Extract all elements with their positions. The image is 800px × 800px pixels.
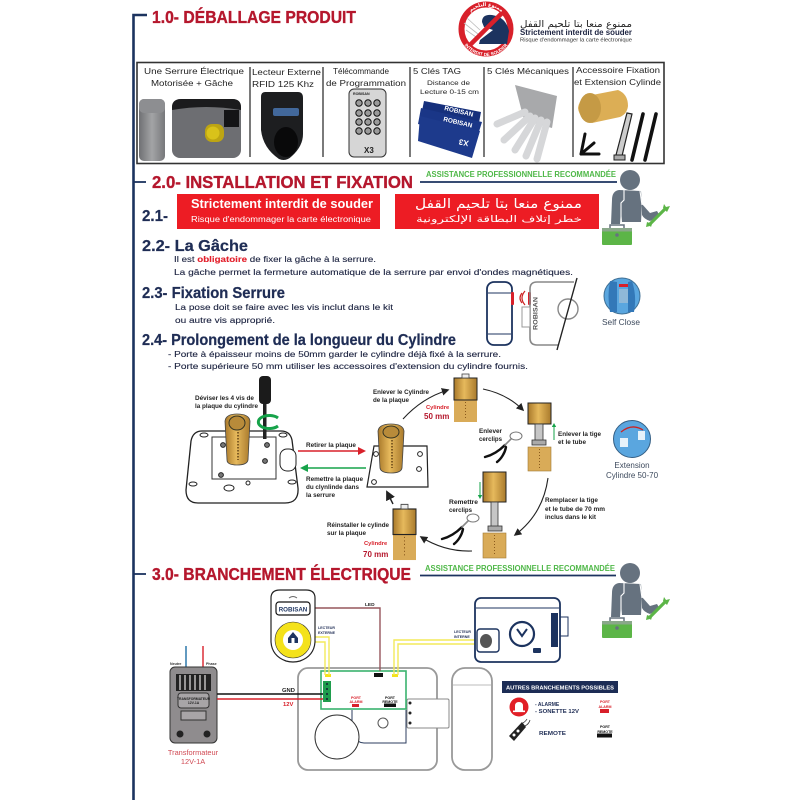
item: programming remote: ROBISAN bbox=[353, 92, 370, 96]
label: remove rod: Enlever la tige bbox=[558, 431, 602, 438]
item: TAG keys: Lecture 0-15 cm bbox=[420, 89, 479, 96]
arrow: replace rod: et le tube de 70 mm bbox=[545, 506, 606, 513]
callout: French warning bbox=[177, 194, 380, 229]
item: TAG keys: 5 Clés TAG bbox=[413, 67, 461, 76]
step 2.4: cylinder extension: - Porte à épaisseur moins de 50mm garder le cylindre déjà fixé à la serrure. bbox=[168, 349, 501, 359]
item: TAG keys: ROBISAN bbox=[443, 116, 473, 130]
arrow: refit plate bbox=[300, 464, 366, 499]
device: transformer: 12V-1A bbox=[188, 701, 200, 705]
panel: PCB: PORT bbox=[351, 696, 362, 700]
icon: technician bbox=[602, 563, 670, 638]
wire: LED bbox=[315, 602, 380, 671]
device: transformer: TRANSFORMATEUR bbox=[177, 697, 211, 701]
device: transformer bbox=[170, 646, 217, 743]
diagram: strike and lock magnetic link bbox=[487, 278, 578, 350]
item: programming remote: de Programmation bbox=[326, 79, 407, 88]
arrow bbox=[421, 537, 472, 551]
label: unscrew: Déviser les 4 vis de bbox=[195, 395, 255, 402]
step: remove cylinder bbox=[373, 389, 448, 419]
icon: no welding badge bbox=[458, 2, 514, 56]
cylinder 70 mm: Cylindre bbox=[364, 541, 388, 547]
device: external reader: EXTERNE bbox=[318, 631, 336, 635]
diagram: strike outline bbox=[452, 668, 492, 770]
panel: PCB: PORT bbox=[385, 696, 396, 700]
wire: LED: LED bbox=[365, 602, 375, 608]
device: internal lock reader bbox=[454, 598, 568, 662]
label: remote: REMOTE bbox=[539, 731, 566, 737]
arrow: remove plate bbox=[298, 442, 366, 455]
step: remove cylinder: de la plaque bbox=[373, 397, 410, 404]
title: 1.0 unpacking: 1.0- DÉBALLAGE PRODUIT bbox=[152, 6, 356, 27]
step 2.3: lock fixing: 2.3- Fixation Serrure bbox=[142, 285, 285, 302]
text block: welding warning header bbox=[520, 19, 632, 44]
text block: welding warning header: Strictement interdit de souder bbox=[520, 28, 632, 37]
item: fixing accessories: Accessoire Fixation bbox=[576, 66, 661, 75]
label: transformer bbox=[168, 748, 219, 766]
label: remove rod: et le tube bbox=[558, 439, 587, 446]
banner: professional assistance: ASSISTANCE PROFESSIONNELLE RECOMMANDÉE bbox=[426, 170, 617, 179]
label: unscrew: la plaque du cylindre bbox=[195, 403, 259, 410]
label: extension: Extension bbox=[614, 461, 650, 470]
icon: circlip pliers: cerclips bbox=[479, 436, 503, 443]
step 2.3: lock fixing: La pose doit se faire avec les vis inclut dans le kit bbox=[175, 302, 394, 312]
heading: 3.0 wiring: 3.0- BRANCHEMENT ÉLECTRIQUE bbox=[152, 563, 411, 584]
item: programming remote bbox=[326, 67, 407, 157]
item: fixing accessories: et Extension Cylinde bbox=[574, 78, 662, 87]
device: internal lock reader: LECTEUR bbox=[454, 630, 471, 634]
device: external reader: LECTEUR bbox=[318, 626, 335, 630]
item: programming remote: X3 bbox=[364, 146, 374, 155]
icon: circlip pliers bbox=[479, 428, 522, 462]
port: remote bbox=[597, 725, 613, 738]
step 2.3: lock fixing bbox=[142, 285, 394, 325]
panel: PCB: ALARM bbox=[350, 700, 362, 704]
diagram: small plate with cylinder bbox=[367, 424, 428, 487]
text block: welding warning header: ممنوع منعا بتا تلحيم القفل bbox=[520, 19, 632, 30]
label: alarm: - ALARME bbox=[535, 702, 560, 708]
item: TAG keys: ROBISAN bbox=[444, 105, 474, 119]
icon: extension cylinder bbox=[614, 420, 650, 458]
icon: technician bbox=[602, 170, 670, 245]
header bar: AUTRES BRANCHEMENTS POSSIBLES bbox=[506, 686, 615, 692]
step 2.2: strike: 2.2- La Gâche bbox=[142, 238, 248, 255]
exploded cylinder: refit rod bbox=[478, 472, 506, 558]
step: remove cylinder: Enlever le Cylindre bbox=[373, 389, 430, 396]
label: transformer: Transformateur bbox=[168, 748, 219, 757]
arrow: replace rod bbox=[515, 478, 606, 535]
step 2.4: cylinder extension: 2.4- Prolongement de la longueur du Cylindre bbox=[142, 332, 456, 349]
item: mechanical keys bbox=[487, 67, 569, 159]
step 2.4: cylinder extension: - Porte supérieure 50 mm utiliser les accessoires d'extension du cylindre fournis. bbox=[168, 361, 528, 371]
label: extension: Cylindre 50-70 bbox=[606, 471, 659, 480]
label: remove rod bbox=[552, 423, 602, 446]
port: alarm: ALARM bbox=[599, 705, 611, 709]
wires: power: 12V bbox=[283, 702, 293, 708]
step 2.4: cylinder extension bbox=[142, 332, 528, 371]
wires: power bbox=[217, 688, 323, 708]
item: RFID reader: Lecteur Externe bbox=[252, 68, 322, 77]
label: alarm bbox=[535, 702, 580, 715]
panel: other connections bbox=[502, 681, 618, 741]
arrow: refit plate: du clynlinde dans bbox=[306, 484, 360, 491]
icon: screwdriver bbox=[258, 376, 278, 439]
banner: professional assistance: ASSISTANCE PROFESSIONNELLE RECOMMANDÉE bbox=[425, 564, 616, 573]
item: lock and strike: Une Serrure Électrique bbox=[144, 66, 245, 76]
label: unscrew bbox=[195, 395, 259, 410]
arrow: refit plate: Remettre la plaque bbox=[306, 476, 364, 483]
icon: circlip pliers: Enlever bbox=[479, 428, 503, 435]
item: lock and strike bbox=[139, 66, 245, 161]
item: TAG keys: Distance de bbox=[427, 80, 471, 87]
wires: internal reader bbox=[394, 640, 476, 675]
item: programming remote: Télécommande bbox=[333, 67, 389, 76]
step 2.1 number: 2.1- bbox=[142, 208, 168, 225]
section rule: left navy spine bbox=[134, 15, 147, 800]
icon: no welding badge: ممنوع التلحيم bbox=[470, 2, 502, 13]
icon: refit circlips bbox=[442, 499, 479, 544]
icon: refit circlips: cerclips bbox=[449, 507, 473, 514]
label: self close: Self Close bbox=[602, 318, 641, 327]
item: fixing accessories bbox=[574, 66, 662, 160]
wires: power: GND bbox=[282, 688, 295, 694]
callout: French warning: Risque d'endommager la carte électronique bbox=[191, 215, 372, 224]
arrow: replace rod: inclus dans le kit bbox=[545, 514, 596, 521]
icon: self close bbox=[604, 278, 640, 314]
port: remote: PORT bbox=[600, 725, 611, 729]
icon: refit circlips: Remettre bbox=[449, 499, 479, 506]
item: TAG keys bbox=[413, 67, 482, 158]
cylinder 50 mm: 50 mm bbox=[424, 412, 449, 421]
item: lock and strike: Motorisée + Gâche bbox=[151, 79, 234, 88]
port: alarm: PORT bbox=[600, 700, 611, 704]
arrow bbox=[483, 389, 523, 410]
label: transformer: 12V-1A bbox=[181, 757, 205, 766]
callout: Arabic warning: ممنوع منعا بتا تلحيم القفل bbox=[415, 197, 582, 212]
label: extension bbox=[606, 461, 659, 480]
cylinder 50 mm bbox=[424, 374, 477, 422]
wires: external reader bbox=[315, 637, 329, 675]
diagram: lock plate with cylinder bbox=[186, 414, 298, 503]
cylinder 70 mm bbox=[327, 504, 416, 560]
arrow: remove plate: Retirer la plaque bbox=[306, 442, 357, 449]
cylinder 70 mm: Réinstaller le cylinde bbox=[327, 522, 390, 529]
cylinder 50 mm: Cylindre bbox=[426, 405, 450, 411]
item: TAG keys: X3 bbox=[458, 137, 469, 148]
diagram: lock body bbox=[298, 668, 449, 770]
callout: Arabic warning bbox=[395, 194, 599, 229]
arrow: replace rod: Remplacer la tige bbox=[545, 497, 599, 504]
device: external reader: ROBISAN bbox=[279, 606, 308, 614]
exploded cylinder: remove rod bbox=[528, 403, 551, 471]
item: mechanical keys: 5 Clés Mécaniques bbox=[487, 67, 569, 76]
port: remote: REMOTE bbox=[597, 730, 613, 734]
heading: 2.0 installation: 2.0- INSTALLATION ET FIXATION bbox=[152, 172, 413, 192]
icon: remote bbox=[509, 719, 530, 741]
step 2.3: lock fixing: ou autre vis approprié. bbox=[175, 315, 275, 325]
step 2.2: strike: Il est obligatoire de fixer la gâche à la serrure. bbox=[174, 254, 376, 264]
icon: alarm bbox=[510, 698, 528, 716]
label: alarm: - SONETTE 12V bbox=[535, 709, 580, 715]
callout: French warning: Strictement interdit de souder bbox=[191, 197, 373, 211]
item: RFID reader bbox=[252, 68, 322, 160]
item: RFID reader: RFID 125 Khz bbox=[252, 80, 314, 89]
icon: no welding badge: INTERDIT DE SOUDER bbox=[464, 43, 508, 56]
panel: package contents bbox=[137, 62, 664, 164]
step 2.2: strike bbox=[142, 238, 573, 277]
cylinder 70 mm: sur la plaque bbox=[327, 530, 367, 537]
step 2.2: strike: La gâche permet la fermeture automatique de la serrure par envoi d'ondes magnétiques. bbox=[174, 267, 573, 277]
port: alarm bbox=[599, 700, 611, 713]
arrow: refit plate: la serrure bbox=[306, 492, 336, 499]
arrow bbox=[387, 492, 393, 504]
text block: welding warning header: Risque d'endommager la carte électronique bbox=[520, 38, 632, 44]
panel: PCB: REMOTE bbox=[382, 700, 398, 704]
device: external reader bbox=[271, 590, 336, 662]
device: internal lock reader: INTERNE bbox=[454, 635, 470, 639]
device: transformer: Neutre bbox=[170, 662, 181, 666]
callout: Arabic warning: خطر إتلاف البطاقة الإلكترونية bbox=[416, 215, 582, 225]
cylinder 70 mm: 70 mm bbox=[363, 550, 388, 559]
diagram: strike and lock magnetic link: ROBISAN bbox=[534, 297, 540, 330]
panel: PCB bbox=[321, 671, 406, 709]
device: transformer: Phase bbox=[206, 662, 217, 666]
